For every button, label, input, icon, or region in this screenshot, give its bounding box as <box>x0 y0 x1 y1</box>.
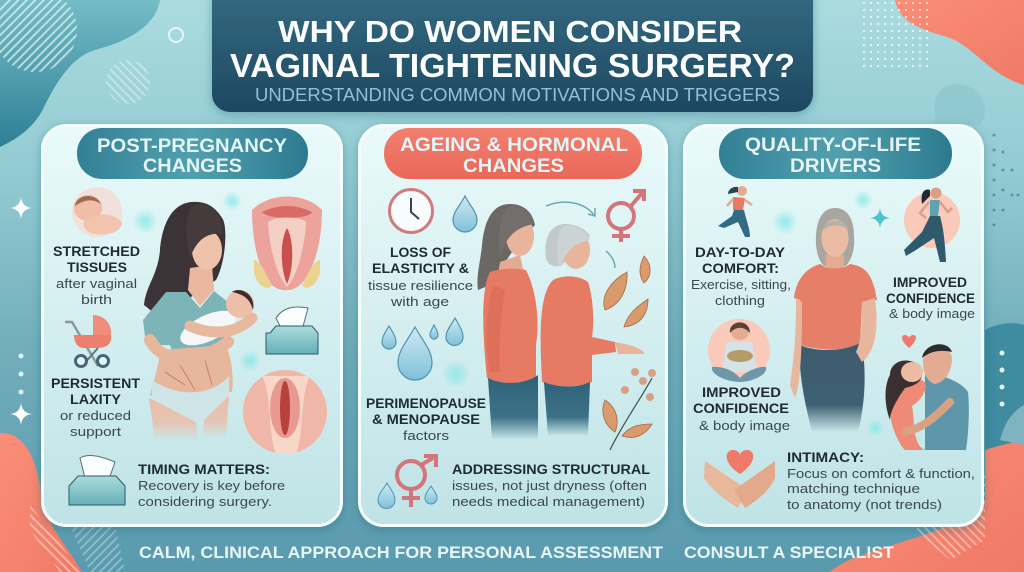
text: improved confidence left <box>693 385 790 433</box>
heading pill: quality of life <box>719 128 952 179</box>
icon: baby stroller <box>65 315 111 366</box>
text: perimenopause: PERIMENOPAUSE <box>366 396 486 411</box>
text: intimacy: matching technique <box>787 481 920 496</box>
icon: heart over handshake <box>704 450 775 508</box>
text: addressing structural <box>452 462 650 509</box>
heading pill: ageing: CHANGES <box>463 156 564 177</box>
text: day-to-day comfort: DAY-TO-DAY <box>695 245 785 260</box>
heading pill: quality of life: QUALITY-OF-LIFE <box>745 135 921 156</box>
text: timing matters: Recovery is key before <box>138 478 285 493</box>
heading pill: ageing: AGEING & HORMONAL <box>400 135 628 156</box>
icon: sleeping baby <box>72 187 122 237</box>
text: intimacy: INTIMACY: <box>787 450 864 465</box>
text: loss of elasticity: LOSS OF <box>390 245 451 260</box>
heading pill: post-pregnancy: CHANGES <box>143 156 242 177</box>
text: day-to-day comfort: COMFORT: <box>702 261 779 276</box>
icon: runner in coral circle <box>904 188 960 262</box>
text: intimacy: to anatomy (not trends) <box>787 497 942 512</box>
panel: post-pregnancy changes <box>42 126 342 526</box>
icon: clock <box>390 190 432 232</box>
text: improved confidence right: IMPROVED <box>893 275 967 290</box>
text: perimenopause: factors <box>403 428 450 443</box>
text: improved confidence left: CONFIDENCE <box>693 401 789 416</box>
text: intimacy: Focus on comfort & function, <box>787 466 975 481</box>
icon: water drop <box>453 196 477 232</box>
icon: gender symbol with drops <box>378 456 437 508</box>
icon: gender symbol top <box>608 191 644 242</box>
text: stretched tissues: after vaginal <box>56 276 137 291</box>
text: stretched tissues: STRETCHED <box>53 244 140 259</box>
text: addressing structural: ADDRESSING STRUCTURAL <box>452 462 650 477</box>
text: persistent laxity: or reduced <box>60 408 131 423</box>
heading pill: post-pregnancy <box>77 128 308 179</box>
icon: tissue box large <box>69 455 125 505</box>
illustration: embracing couple <box>886 344 969 450</box>
footer text: CALM, CLINICAL APPROACH FOR PERSONAL ASSESSMENT <box>139 544 663 562</box>
title <box>230 14 795 84</box>
text: intimacy <box>787 450 975 512</box>
text: stretched tissues: TISSUES <box>67 260 127 275</box>
text: persistent laxity <box>51 376 141 439</box>
text: perimenopause <box>366 396 486 443</box>
text: day-to-day comfort: Exercise, sitting, <box>691 277 791 292</box>
footer text: CONSULT A SPECIALIST <box>684 544 894 562</box>
text: stretched tissues: birth <box>81 292 112 307</box>
text: improved confidence left: & body image <box>699 418 790 433</box>
icon: woman seated with bowl <box>708 319 770 382</box>
icon: heart <box>902 335 916 348</box>
text: loss of elasticity: with age <box>390 294 449 309</box>
illustration: smiling woman standing <box>790 208 877 432</box>
text: day-to-day comfort <box>691 245 791 308</box>
heading pill: post-pregnancy: POST-PREGNANCY <box>97 136 287 157</box>
text: timing matters: TIMING MATTERS: <box>138 462 270 477</box>
text: loss of elasticity: ELASTICITY & <box>372 261 469 276</box>
text: addressing structural: issues, not just dryness (often <box>452 478 647 493</box>
diagram: internal anatomy <box>252 196 322 290</box>
text: persistent laxity: PERSISTENT <box>51 376 141 391</box>
text: day-to-day comfort: clothing <box>715 293 765 308</box>
text: loss of elasticity: tissue resilience <box>368 278 473 293</box>
footer text <box>139 544 894 562</box>
subtitle: UNDERSTANDING COMMON MOTIVATIONS AND TRIGGERS <box>255 85 780 105</box>
text: improved confidence left: IMPROVED <box>702 385 781 400</box>
text: loss of elasticity <box>368 245 473 309</box>
diagram: external anatomy circle <box>243 370 327 454</box>
sparkle glow <box>442 360 470 388</box>
text: improved confidence right <box>886 275 975 321</box>
heading pill: ageing <box>384 128 642 179</box>
illustration: mother holding newborn <box>143 202 254 440</box>
panel: ageing and hormonal changes <box>360 126 666 526</box>
heading pill: quality of life: DRIVERS <box>790 156 881 177</box>
text: timing matters <box>138 462 285 509</box>
title: VAGINAL TIGHTENING SURGERY? <box>230 47 795 84</box>
illustration: two women ageing profile <box>477 204 645 440</box>
icon: flowering branch <box>603 368 656 450</box>
text: improved confidence right: & body image <box>889 306 975 321</box>
sparkle glow <box>132 191 261 372</box>
text: timing matters: considering surgery. <box>138 494 272 509</box>
text: improved confidence right: CONFIDENCE <box>886 291 975 306</box>
panel: quality-of-life drivers <box>684 126 982 526</box>
title: WHY DO WOMEN CONSIDER <box>278 14 742 49</box>
text: stretched tissues <box>53 244 140 307</box>
icon: water drops cluster <box>382 318 463 380</box>
arrow: curved ageing arrow <box>546 202 615 268</box>
sparkle glow <box>772 190 890 437</box>
icon: runner left <box>718 186 752 237</box>
text: persistent laxity: support <box>70 424 121 439</box>
title banner <box>212 0 813 112</box>
icon: autumn leaves <box>604 256 650 327</box>
icon: tissue box <box>266 307 318 354</box>
text: addressing structural: needs medical management) <box>452 494 645 509</box>
text: persistent laxity: LAXITY <box>70 392 121 407</box>
text: perimenopause: & MENOPAUSE <box>372 412 480 427</box>
